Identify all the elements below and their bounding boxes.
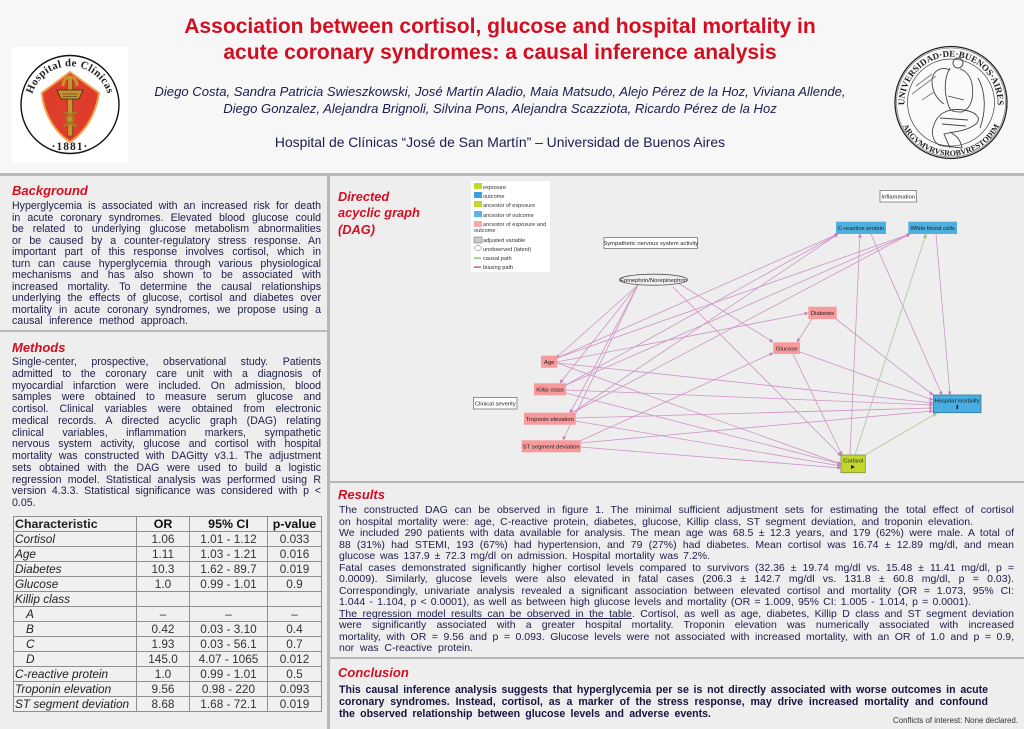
chart: directed acyclic graph bbox=[471, 181, 982, 474]
logo: Universidad de Buenos Aires bbox=[894, 46, 1008, 160]
text block: background: or be caused by a counter-regulatory stress response. An bbox=[12, 234, 321, 246]
heading: methods: Methods bbox=[12, 340, 65, 355]
legend bbox=[471, 181, 550, 272]
node: cortisol: Cortisol bbox=[843, 458, 863, 464]
legend: outcome bbox=[483, 194, 504, 200]
node: age bbox=[541, 356, 557, 368]
text block: results: 0.0009). Similarly, glucose levels were also elevated in fatal cases (206.3 ± 142.7 mg/dl vs. 131.8 ± 60.8 mg/dl, p = 0.03). bbox=[339, 573, 1014, 585]
table: regression results: 0.98 - 220 bbox=[202, 682, 255, 696]
table: regression results bbox=[13, 516, 322, 712]
legend: adjusted variable bbox=[483, 238, 525, 244]
node: epinephrine bbox=[620, 274, 688, 285]
node: diabetes bbox=[808, 307, 837, 319]
table: regression results: – bbox=[291, 607, 298, 621]
text block: results: Fatal cases demonstrated significantly higher cortisol levels compared to survivors (32.36 ± 19.74 mg/dl vs. 15.48 ± 11.41 mg/dl, p = bbox=[339, 562, 1014, 574]
text block: methods: admitted to the coronary care unit with a diagnosis of bbox=[12, 368, 321, 380]
table: regression results: 0.99 - 1.01 bbox=[200, 667, 257, 681]
table: regression results: 0.03 - 56.1 bbox=[200, 637, 257, 651]
table: regression results: 0.019 bbox=[280, 697, 309, 711]
text block: results: The constructed DAG can be observed in figure 1. The minimal sufficient adjustment sets for estimating the total effect of cortisol bbox=[339, 504, 1014, 516]
text block: background: causal inference method approach. bbox=[12, 315, 188, 327]
legend: outcome bbox=[474, 228, 495, 234]
text block: methods: regression model. Statistical analysis was performed using R bbox=[12, 474, 321, 486]
table: regression results: Age bbox=[15, 547, 36, 561]
logo: Universidad de Buenos Aires: UNIVERSIDAD·DE·BUENOS·AIRES bbox=[898, 50, 1004, 105]
node: clinical severity bbox=[474, 398, 517, 409]
node: glucose: Glucose bbox=[776, 346, 798, 352]
table: regression results: 0.42 bbox=[152, 622, 174, 636]
text block: methods: Single-center, prospective, observational study. Patients bbox=[12, 356, 321, 368]
text block: results: mortality, with OR = 9.56 and p = 0.093. Glucose levels were not associated with increased mortality, with an OR of 1.0 and p = 0.9, bbox=[339, 631, 1014, 643]
table: regression results: Characteristic bbox=[15, 517, 98, 531]
table: regression results: B bbox=[26, 622, 34, 636]
text block: results: were significantly associated with a greater hospital mortality. Troponin elevation was numerically associated with increased bbox=[339, 619, 1014, 631]
text block: conclusion: This causal inference analysis suggests that hyperglycemia per se is not directly associated with worse outcomes in acute bbox=[339, 684, 988, 696]
table: regression results: 1.01 - 1.12 bbox=[200, 532, 257, 546]
table: regression results: Killip class bbox=[15, 592, 70, 606]
logo: Hospital de Clínicas: Hospital de Clínicas bbox=[26, 58, 112, 94]
table: regression results: 0.019 bbox=[280, 562, 309, 576]
node: inflammation bbox=[880, 190, 916, 202]
legend: causal path bbox=[483, 256, 512, 262]
legend: ancestor of exposure and bbox=[483, 222, 546, 228]
node: hospital mortality bbox=[934, 395, 981, 413]
table: regression results: 0.016 bbox=[280, 547, 309, 561]
table: regression results: C bbox=[26, 637, 35, 651]
node: sympathetic activity bbox=[603, 238, 698, 248]
node: glucose bbox=[773, 342, 800, 354]
text block: methods: 0.05. bbox=[12, 497, 36, 509]
legend: biasing path bbox=[483, 265, 513, 271]
text block: methods: nervous system activity, glucose and cortisol with hospital bbox=[12, 438, 321, 450]
text block: results: nor was C-reactive protein. bbox=[339, 642, 473, 654]
text block: background: mechanisms and has also shown to be associated with bbox=[12, 269, 321, 281]
panel: methods bbox=[12, 340, 321, 509]
legend: unobserved (latent) bbox=[483, 247, 531, 253]
node: clinical severity: Clinical severity bbox=[475, 402, 516, 408]
text block: background: mortality in acute coronary syndromes, we propose using a bbox=[12, 304, 321, 316]
node: hospital mortality: Hospital mortality bbox=[935, 398, 980, 404]
title: acute coronary syndromes: a causal inference analysis bbox=[223, 41, 777, 64]
text block: results: We included 290 patients with data available for analysis. The mean age was 68.5 ± 12.3 years, and 179 (62%) were male. A total of bbox=[339, 527, 1014, 539]
text block: background bbox=[12, 200, 321, 327]
node: age: Age bbox=[544, 360, 555, 366]
text block: background: Hyperglycemia is associated with an increased risk for death bbox=[12, 200, 321, 212]
heading: results: Results bbox=[338, 487, 385, 502]
table: regression results: 9.56 bbox=[152, 682, 174, 696]
node: st segment deviation bbox=[522, 440, 581, 452]
table: regression results: 1.06 bbox=[152, 532, 174, 546]
text block: conclusion bbox=[339, 684, 988, 720]
text block: results: The regression model results can be observed in the table. Cortisol, as well as age, diabetes, Killip D class and ST segment deviation bbox=[339, 608, 1014, 620]
table: regression results: 1.0 bbox=[155, 667, 171, 681]
table: regression results: 0.03 - 3.10 bbox=[200, 622, 257, 636]
text block: methods: cortisol. Clinical variables were obtained from electronic bbox=[12, 403, 321, 415]
table: regression results: Troponin elevation bbox=[15, 682, 111, 696]
table: regression results: Diabetes bbox=[15, 562, 62, 576]
text block: background: underlying the effects of glucose, cortisol and diabetes over bbox=[12, 292, 321, 304]
table: regression results: 1.11 bbox=[152, 547, 174, 561]
text block: background: be related to underlying glucose metabolism abnormalities bbox=[12, 223, 321, 235]
node: cortisol bbox=[841, 455, 865, 473]
text block: results: on hospital mortality were: age, C-reactive protein, diabetes, glucose, Killip class, ST segment deviation, and troponin elevation. bbox=[339, 516, 973, 528]
text block: methods: version 4.3.3. Statistical significance was considered with p < bbox=[12, 485, 321, 497]
node: troponin elevation bbox=[524, 413, 576, 425]
edges: causal paths bbox=[855, 234, 937, 455]
node: white blood cells: White blood cells bbox=[910, 226, 955, 232]
node: diabetes: Diabetes bbox=[811, 311, 834, 317]
table: regression results: 1.03 - 1.21 bbox=[200, 547, 257, 561]
edges: biasing paths bbox=[556, 234, 950, 468]
authors: Diego Gonzalez, Alejandra Brignoli, Silvina Pons, Alejandra Scazziota, Ricardo Pérez de la Hoz bbox=[223, 101, 777, 116]
table: regression results: 0.4 bbox=[286, 622, 303, 636]
text block: background: important part of this response involves cortisol, which in bbox=[12, 246, 321, 258]
text block: background: in acute coronary syndromes. Elevated blood glucose could bbox=[12, 212, 321, 224]
text block: methods: clinical variables, inflammation markers, sympathetic bbox=[12, 426, 321, 438]
node: troponin elevation: Troponin elevation bbox=[526, 417, 574, 423]
panel: results bbox=[338, 487, 1014, 654]
panel: background bbox=[12, 183, 321, 327]
table: regression results: 0.033 bbox=[280, 532, 309, 546]
text block: conclusion: coronary syndromes. Instead, cortisol, as a marker of the stress response, may drive increased mortality and confound bbox=[339, 696, 988, 708]
node: st segment deviation: ST segment deviation bbox=[523, 444, 580, 450]
text block: background: turn can cause hyperglycemia through various physiological bbox=[12, 258, 321, 270]
header band bbox=[0, 0, 1024, 173]
legend: ancestor of outcome bbox=[483, 213, 534, 219]
authors: Diego Costa, Sandra Patricia Swieszkowski, José Martín Aladio, Maia Matsudo, Alejo Pérez de la Hoz, Viviana Allende, bbox=[154, 84, 846, 99]
title: Association between cortisol, glucose and hospital mortality in bbox=[184, 15, 816, 38]
panel: conclusion bbox=[338, 665, 988, 720]
heading: background: Background bbox=[12, 183, 88, 198]
node: c-reactive protein bbox=[836, 222, 886, 234]
table: regression results: Cortisol bbox=[15, 532, 55, 546]
affiliation: Hospital de Clínicas “José de San Martín” – Universidad de Buenos Aires bbox=[275, 134, 725, 150]
logo: Hospital de Clínicas: ·1881· bbox=[52, 141, 88, 153]
text block: methods: samples were obtained to measure serum glucose and bbox=[12, 391, 321, 403]
text block: methods: mortality was constructed with DAGitty v3.1. The adjustment bbox=[12, 450, 321, 462]
text block: results: 88 (31%) had STEMI, 193 (67%) had hypertension, and 79 (27%) had diabetes. Mean cortisol was 16.74 ± 12.89 mg/dl, and mean bbox=[339, 539, 1014, 551]
table: regression results: 0.5 bbox=[286, 667, 303, 681]
logo: Universidad de Buenos Aires: ARGVMVRVSROBVRESTODIM bbox=[902, 124, 1000, 156]
nodes bbox=[474, 190, 981, 473]
table: regression results: – bbox=[160, 607, 166, 621]
node: inflammation: Inflammation bbox=[881, 194, 915, 200]
table: regression results: 1.62 - 89.7 bbox=[200, 562, 257, 576]
table: regression results: 8.68 bbox=[152, 697, 174, 711]
node: white blood cells bbox=[908, 222, 957, 234]
text block: results: glucose was 137.9 ± 72.3 mg/dl on admission. Hospital mortality was 7.2%. bbox=[339, 550, 710, 562]
table: regression results: OR bbox=[154, 517, 172, 531]
table: regression results: – bbox=[225, 607, 232, 621]
table: regression results: 0.99 - 1.01 bbox=[200, 577, 257, 591]
heading: directed acyclic graph bbox=[338, 189, 420, 237]
table: regression results: 145.0 bbox=[148, 652, 178, 666]
logo: Hospital de Clínicas bbox=[20, 54, 120, 154]
table: regression results: Glucose bbox=[15, 577, 58, 591]
text block: background: increased mortality. To determine the causal relationships bbox=[12, 280, 321, 292]
text block: results: 1.044 - 1.104, p < 0.0001), as well as between high glucose levels and mortality (OR = 1.009, 95% CI: 1.005 - 1.014, p = 0.0001). bbox=[339, 596, 971, 608]
node: sympathetic activity: Sympathetic nervous system activity bbox=[603, 241, 698, 247]
heading: directed acyclic graph: acyclic graph bbox=[338, 205, 420, 220]
table: regression results: 1.0 bbox=[155, 577, 171, 591]
table: regression results: 0.012 bbox=[280, 652, 309, 666]
text block: results: Correspondingly, univariate analysis revealed a significant association between elevated cortisol and mortality (OR = 1.073, 95% CI: bbox=[339, 585, 1014, 597]
node: killip class: Killip class bbox=[536, 388, 564, 394]
node: killip class bbox=[534, 383, 566, 395]
text block: results bbox=[339, 504, 1014, 654]
table: regression results: p-value bbox=[273, 517, 316, 531]
table: regression results: 1.68 - 72.1 bbox=[200, 697, 257, 711]
table: regression results: 10.3 bbox=[152, 562, 174, 576]
node: c-reactive protein: C-reactive protein bbox=[838, 226, 884, 232]
footnote: conflicts of interest: Conflicts of interest: None declared. bbox=[893, 716, 1018, 725]
table: regression results: D bbox=[26, 652, 35, 666]
text block: methods: myocardial infarction were included. On admission, blood bbox=[12, 380, 321, 392]
table: regression results: 95% CI bbox=[208, 517, 249, 531]
title bbox=[184, 15, 816, 64]
table: regression results: 1.93 bbox=[152, 637, 174, 651]
text block: methods: sets obtained with the DAG were used to build a logistic bbox=[12, 462, 321, 474]
text block: conclusion: the observed relationship between glucose levels and adverse events. bbox=[339, 708, 711, 720]
table: regression results: ST segment deviation bbox=[15, 697, 129, 711]
text block: methods bbox=[12, 356, 321, 509]
table: regression results: C-reactive protein bbox=[15, 667, 108, 681]
heading: directed acyclic graph: Directed bbox=[338, 189, 389, 204]
authors bbox=[154, 84, 846, 116]
heading: conclusion: Conclusion bbox=[338, 665, 409, 680]
heading: directed acyclic graph: (DAG) bbox=[338, 222, 375, 237]
legend: ancestor of exposure bbox=[483, 203, 535, 209]
table: regression results: A bbox=[26, 607, 34, 621]
table: regression results: 0.9 bbox=[286, 577, 303, 591]
table: regression results: 0.7 bbox=[286, 637, 303, 651]
table: regression results: 0.093 bbox=[280, 682, 309, 696]
legend: exposure bbox=[483, 185, 506, 191]
text block: methods: medical records. A directed acyclic graph (DAG) relating bbox=[12, 415, 321, 427]
table: regression results: 4.07 - 1065 bbox=[199, 652, 258, 666]
node: epinephrine: Epinephrin/Norepinephrin bbox=[620, 278, 687, 284]
